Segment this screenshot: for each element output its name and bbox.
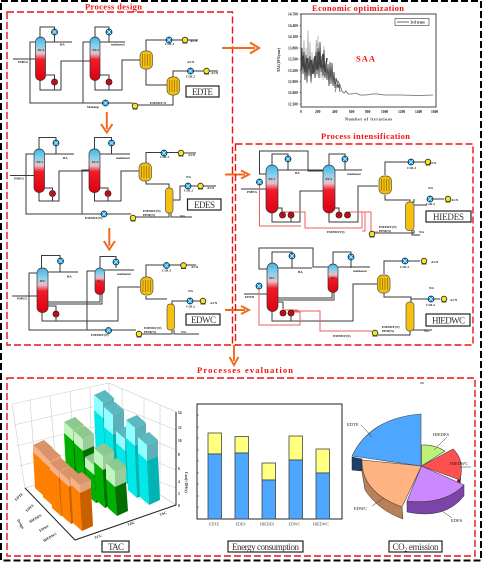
heading: process intensification: Process intensification <box>321 131 410 141</box>
y axis: 14.100 <box>288 35 298 39</box>
flowsheet: EDWC <box>12 256 220 337</box>
z axis ticks: 12 <box>178 426 182 430</box>
flowsheet: HIEDES: EC1 <box>268 177 275 181</box>
label: EDWC: EDWC <box>191 315 216 325</box>
flowsheet: EDTE: EMMbT/N <box>150 101 167 105</box>
flowsheet: HIEDES: PPM(N) <box>379 229 391 233</box>
label: HIEDES <box>426 211 471 222</box>
pie labels: HIEDES <box>433 432 449 437</box>
3D plot walls <box>12 383 176 540</box>
category labels: HIEDWC <box>313 522 329 526</box>
label: HIEDWC <box>426 314 470 326</box>
flowsheet: EDWC: BA <box>67 274 72 278</box>
flowsheet: EDWC: ACN <box>210 301 218 305</box>
bar: EDWC <box>289 436 302 519</box>
cost type labels <box>94 511 168 540</box>
slice side: HIEDWC <box>457 467 461 488</box>
pie labels <box>347 422 471 523</box>
category labels: HIEDES <box>260 522 274 526</box>
design axis labels: EDTE <box>14 492 24 502</box>
flowsheet: EDES: EMMbT(N) <box>85 216 103 220</box>
flowsheet: HIEDWC: WC <box>269 276 275 280</box>
y axis: TAC(10⁶$/year) <box>277 47 281 72</box>
orange bars <box>33 440 93 531</box>
chart: CO2 emission 3D pie <box>347 414 471 554</box>
pie labels: EDWC <box>354 506 367 511</box>
flowsheet: HIEDES: methanol <box>347 172 361 176</box>
pie labels: EDES <box>451 518 463 523</box>
flowsheet: EDES: ACN <box>207 186 215 190</box>
y axis: 12.900 <box>288 80 298 84</box>
y axis: 13.800 <box>288 46 298 50</box>
flowsheet: EDES <box>10 138 221 221</box>
label: CO2 emission: emission <box>407 542 439 552</box>
flowsheet: HIEDES: BA <box>295 171 300 175</box>
slice: EDWC <box>362 460 422 507</box>
chart legend: 3rd trans <box>410 20 425 24</box>
x axis: 400 <box>332 110 338 114</box>
y axis: 13.500 <box>288 58 298 62</box>
flowsheet: EDES: BA <box>63 156 68 160</box>
flowsheet: HIEDWC <box>244 248 470 338</box>
slice side: EDES <box>407 485 464 514</box>
flowsheet: EDTE <box>13 27 219 109</box>
label: EDTE <box>186 86 219 97</box>
x axis: 1200 <box>398 110 405 114</box>
flowsheet: EDWC: methanol <box>117 272 131 276</box>
flowsheet: HIEDWC: PPM(N) <box>382 329 394 333</box>
label: TAC: TAC <box>108 542 124 552</box>
flowsheet: HIEDES: NG <box>419 230 424 234</box>
green bars <box>64 417 128 516</box>
design axis labels <box>14 492 58 543</box>
y axis: 14.700 <box>288 12 298 16</box>
flowsheet: EDTE: ACN <box>187 60 195 64</box>
y axis: 13.200 <box>288 69 298 73</box>
label: EDTE: EDTE <box>192 87 214 97</box>
x axis: 0 <box>300 110 302 114</box>
label: CO2 emission: 2 <box>404 548 407 554</box>
label: EDWC <box>186 314 220 325</box>
flowsheet: HIEDWC: COL3 <box>400 265 409 269</box>
panel: process design <box>7 2 232 345</box>
category labels: EDWC <box>288 522 301 526</box>
cost type labels: TCC <box>94 533 103 540</box>
flowsheet: HIEDWC: ACN <box>450 298 458 302</box>
label: EDES <box>188 199 221 210</box>
arrow: EDES to intensification <box>225 170 249 178</box>
slice: HIEDES <box>422 445 445 466</box>
slice side: EDTE <box>352 457 362 471</box>
line chart: SAA convergence <box>277 12 438 122</box>
flowsheet: EDWC: EC <box>97 279 102 283</box>
flowsheet: EDES: EMMbT(N) <box>143 209 161 213</box>
flowsheet: HIEDES: NG <box>428 186 433 190</box>
flowsheet: EDTE: PMEG <box>18 60 29 64</box>
pie labels: HIEDWC <box>450 461 468 466</box>
heading: economic optimization: Economic optimization <box>312 3 404 13</box>
panel: economic optimization <box>277 3 438 122</box>
category labels: EDES <box>236 522 246 526</box>
flowsheet: EDES: COL2 <box>184 188 193 192</box>
flowsheet: HIEDWC: FEED <box>245 295 255 299</box>
arrow: to process evaluation <box>230 345 238 365</box>
flowsheet: HIEDWC: ACN <box>431 260 439 264</box>
flowsheet: EDTE: EC2 <box>92 48 99 52</box>
flowsheet: HIEDWC: EMMbT(N) <box>382 325 400 329</box>
label: TAC <box>102 541 129 552</box>
pie labels: EDTE <box>347 422 359 427</box>
flowsheet: HIEDES: PMEG <box>247 190 258 194</box>
slice: HIEDWC <box>422 449 461 480</box>
x axis: 1600 <box>431 110 438 114</box>
tick mark above pie <box>420 382 424 384</box>
label: HIEDES: HIEDES <box>433 212 464 222</box>
z axis ticks: 14 <box>178 411 182 415</box>
flowsheet: EDTE: BA <box>60 42 65 46</box>
z axis ticks: 4 <box>178 480 180 484</box>
panel: processes evaluation <box>7 365 475 556</box>
design axis labels: EDES <box>25 503 35 513</box>
flowsheet: HIEDES: EMMbT(N) <box>379 225 397 229</box>
label: HIEDWC: HIEDWC <box>432 316 465 326</box>
flowsheet: EDES: EC1 <box>36 160 43 164</box>
flowsheet: EDTE: COL3 <box>165 42 174 46</box>
x axis: 600 <box>349 110 355 114</box>
flowsheet: EDWC: PPM(N) <box>144 330 156 334</box>
y axis <box>277 12 301 106</box>
flowsheet: HIEDES <box>241 151 471 237</box>
flowsheet: EDTE: Makeup <box>87 105 99 109</box>
label: energy consumption: Energy consumption <box>232 542 300 552</box>
flowsheet: HIEDES: ACN <box>429 161 437 165</box>
flowsheet: EDWC: COL3 <box>162 268 171 272</box>
design axis labels: HIEDES <box>28 514 42 524</box>
flowsheet: HIEDWC: NG <box>424 329 429 333</box>
flowsheet: HIEDWC: EMMbT(N) <box>333 334 351 338</box>
arrow: EDES to EDWC <box>104 228 115 250</box>
z axis ticks <box>178 411 188 508</box>
slice: EDES <box>407 466 464 502</box>
z axis ticks: 0 <box>178 504 180 508</box>
flowsheet: EDTE: COL2 <box>186 74 195 78</box>
design axis labels: Design <box>16 518 25 529</box>
heading: processes evaluation: Processes evaluation <box>197 365 293 375</box>
bar: EDES <box>235 436 248 519</box>
y axis: 12.600 <box>288 91 298 95</box>
flowsheet: EDWC: COL2 <box>186 304 195 308</box>
arrow: design to economic optimization <box>222 42 259 54</box>
flowsheet: EDES: NG <box>186 175 191 179</box>
y axis: 12.300 <box>288 102 298 106</box>
flowsheet: EDTE: methanol <box>111 42 125 46</box>
flowsheet: EDES: ACN <box>188 153 196 157</box>
y axis: 14.400 <box>288 24 298 28</box>
flowsheet: HIEDWC: NG <box>429 286 434 290</box>
flowsheet: EDTE: ACN <box>190 39 198 43</box>
flowsheet: HIEDWC: methanol <box>353 269 367 273</box>
label: CO2 emission: CO <box>392 542 405 552</box>
flowsheet: HIEDES: COL3 <box>407 166 416 170</box>
arrow: EDWC to intensification <box>225 306 249 314</box>
chart: energy consumption stacked bars <box>197 404 342 552</box>
slice: EDTE <box>352 414 421 466</box>
flowsheet: HIEDES: ACN <box>451 198 459 202</box>
flowsheet: EDES: methanol <box>116 156 130 160</box>
slice side: EDWC <box>362 460 403 519</box>
chart: TAC 3D bars <box>12 383 188 552</box>
z axis ticks: 2 <box>178 492 180 496</box>
panel: process intensification <box>236 131 473 345</box>
flowsheet: HIEDWC: EC <box>331 276 336 280</box>
flowsheet: HIEDES: EMMbT(N) <box>327 230 345 234</box>
x axis: 1400 <box>415 110 422 114</box>
flowsheet: EDWC: EMMbT(N) <box>144 326 162 330</box>
x axis: Number of iterations <box>345 116 392 122</box>
label: EDES: EDES <box>194 200 215 210</box>
z axis ticks: 10 <box>178 439 182 443</box>
flowsheet: EDTE: ACN <box>211 71 219 75</box>
flowsheet: EDES: EC2 <box>92 160 99 164</box>
flowsheet: HIEDWC: COL2 <box>426 303 435 307</box>
z axis ticks: Cost(×10⁶$/y) <box>184 472 188 493</box>
arrow: EDTE to EDES <box>101 112 112 132</box>
x axis: 1000 <box>381 110 388 114</box>
heading: process design: Process design <box>85 2 142 12</box>
bar: EDTE <box>208 433 222 519</box>
flowsheet: EDWC: ACN <box>191 265 199 269</box>
category labels <box>209 522 329 526</box>
chart legend <box>395 18 429 26</box>
flowsheet: EDES: COL3 <box>160 155 169 159</box>
flowsheet: EDES: PPM(N) <box>143 213 155 217</box>
x axis: 200 <box>315 110 321 114</box>
bar: HIEDWC <box>316 449 330 519</box>
flowsheet: EDWC: WC <box>40 279 46 283</box>
bar: HIEDES <box>262 463 276 519</box>
label: CO2 emission <box>389 541 442 554</box>
flowsheet: EDWC: EMMbT(N) <box>91 333 109 337</box>
flowsheet: HIEDES: COL2 <box>426 202 435 206</box>
axes <box>25 412 176 540</box>
category labels: EDTE <box>209 522 220 526</box>
z axis ticks: 8 <box>178 453 180 457</box>
flowsheet: HIEDWC: BA <box>298 270 303 274</box>
x axis <box>300 110 438 122</box>
flowsheet: HIEDES: EC2 <box>326 177 332 181</box>
cost type labels: TOC <box>127 520 136 527</box>
flowsheet: EDWC: NG <box>181 330 186 334</box>
cost type labels: TAC <box>159 511 168 517</box>
z axis ticks: 6 <box>178 467 180 471</box>
flowsheet: EDTE: EC1 <box>38 48 45 52</box>
x axis: 800 <box>365 110 371 114</box>
design axis labels: HIEDWC <box>42 532 58 543</box>
flowsheet: EDES: PMEG <box>14 176 25 180</box>
flowsheet: EDWC: NG <box>188 289 193 293</box>
chart annotation: SAA: SAA <box>356 54 376 64</box>
design axis labels: EDWC <box>38 524 51 533</box>
flowsheet: EDES: NG <box>180 214 185 218</box>
flowsheet: EDWC: PMEG <box>17 296 28 300</box>
cyan bars <box>94 390 160 505</box>
